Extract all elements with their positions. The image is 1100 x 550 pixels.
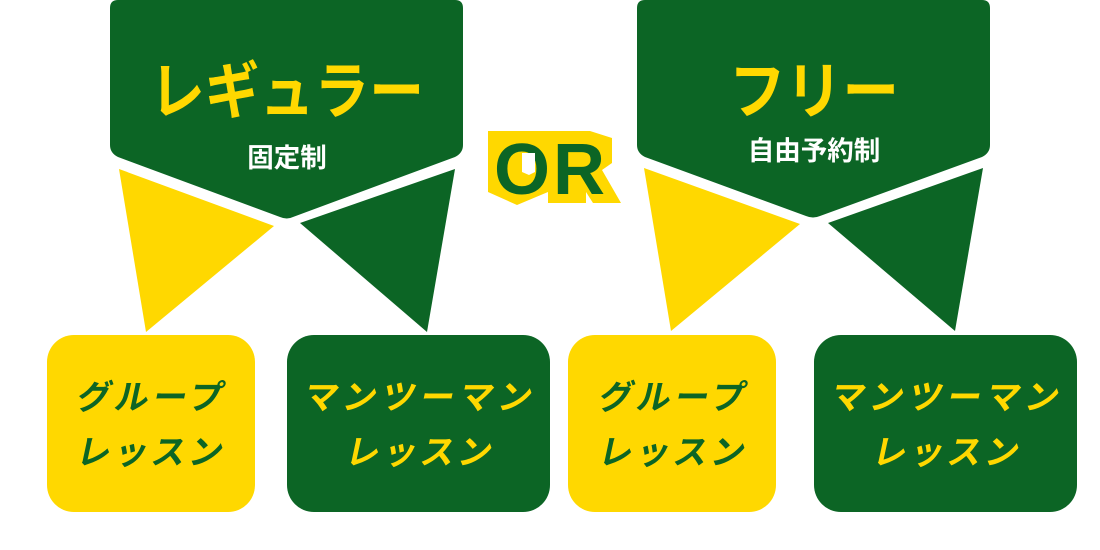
panel: free plan [568,0,1077,512]
card: free private lesson [814,335,1077,512]
subheading: fixed schedule: 固定制 [247,143,327,173]
card: regular private lesson: レッスン [342,434,496,472]
card: regular group lesson: グループ [73,379,227,417]
shield: regular [110,0,463,218]
arrow: free to private [828,168,983,331]
card: free group lesson [568,335,776,512]
arrow: free to group [644,168,800,331]
card: free private lesson: マンツーマン [827,379,1063,417]
heading: regular: レギュラー [150,58,424,127]
card: free group lesson: グループ [595,379,749,417]
card: regular private lesson: マンツーマン [300,379,536,417]
shield: free [637,0,990,218]
card: free private lesson: レッスン [869,434,1023,472]
badge: OR: OR [494,130,605,210]
card: regular group lesson [47,335,255,512]
card: free group lesson: レッスン [595,434,749,472]
arrow: regular to private [300,169,455,332]
card: regular group lesson: レッスン [73,434,227,472]
heading: free: フリー [729,58,899,127]
panel: regular plan [47,0,550,512]
subheading: free reservation: 自由予約制 [748,136,880,166]
arrow: regular to group [119,169,274,332]
card: regular private lesson [287,335,550,512]
